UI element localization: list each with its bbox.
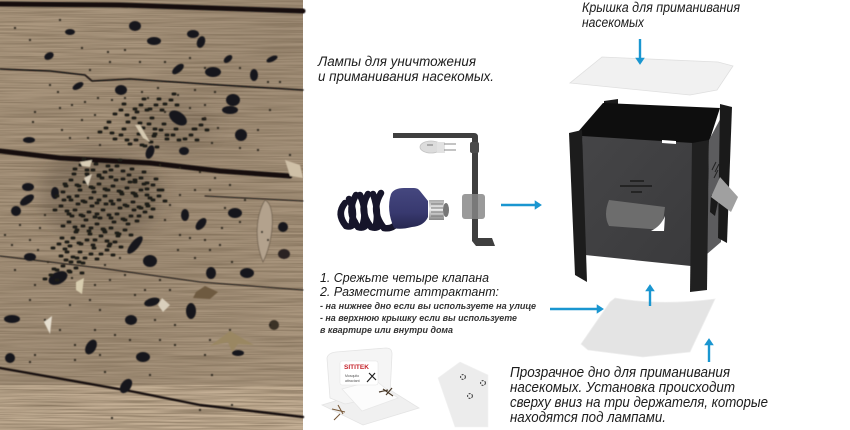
bottom description text: находятся под лампами. — [510, 410, 666, 426]
arrow: up to bottom sheet — [708, 340, 710, 362]
label: lid: Крышка для приманивания — [582, 0, 740, 15]
board cracks — [0, 4, 303, 417]
attractant package — [322, 348, 419, 425]
instructions text: - на нижнее дно если вы используете на улице — [320, 301, 537, 312]
attractant package: attractant — [345, 379, 360, 383]
instructions text: 2. Разместите аттрактант: — [319, 284, 499, 299]
heading: lamps — [317, 54, 494, 84]
bottom description text: Прозрачное дно для приманивания — [510, 365, 730, 381]
vent slits — [620, 181, 652, 192]
heading: lamps: Лампы для уничтожения — [317, 54, 476, 69]
heading: lamps: и приманивания насекомых. — [318, 69, 494, 84]
bottom sheet — [581, 298, 715, 357]
mosquito right — [379, 388, 393, 396]
front panel — [582, 136, 693, 266]
attractant package: Mosquito — [345, 374, 359, 378]
instructions text — [319, 270, 537, 336]
right post — [690, 140, 709, 292]
bottom description text: сверху вниз на три держателя, которые — [510, 395, 768, 411]
bottom description text: насекомых. Установка происходит — [510, 380, 735, 396]
pale moths — [44, 125, 303, 352]
arrow: up to box — [649, 286, 651, 306]
black trap box — [569, 99, 738, 292]
instructions text: - на верхнюю крышку если вы используете — [320, 313, 518, 324]
instructions text: 1. Срежьте четыре клапана — [320, 270, 489, 285]
instructions text: в квартире или внутри дома — [320, 325, 453, 336]
side flap — [711, 177, 738, 212]
right side opening — [710, 195, 718, 216]
label: lid — [582, 0, 740, 30]
label: lid: насекомых — [582, 15, 645, 30]
large insects — [4, 21, 290, 395]
package label — [340, 361, 378, 385]
attractant underside — [438, 362, 488, 427]
front flap — [606, 200, 665, 230]
attractant package: SITITEK — [344, 364, 369, 371]
right rear post — [718, 104, 732, 243]
back left tab — [604, 99, 618, 110]
arrow: lamp to box — [501, 204, 540, 206]
inner back wall — [577, 103, 720, 145]
arrow: to bottom sheet — [550, 308, 602, 310]
bottom description text — [510, 365, 768, 426]
right side panel — [707, 112, 724, 254]
icon: blue spiral lamp — [341, 188, 449, 229]
white slot — [662, 140, 676, 144]
lid sheet — [570, 57, 733, 95]
icon: small halogen bulb — [420, 141, 456, 153]
mosquito left — [332, 405, 345, 420]
left post — [569, 130, 587, 282]
wood knot — [257, 200, 272, 262]
lamp bracket — [393, 133, 495, 246]
arrow: down to lid — [639, 39, 641, 63]
insect debris cluster — [50, 100, 202, 275]
photo: dead insects on wooden boards — [0, 0, 303, 430]
